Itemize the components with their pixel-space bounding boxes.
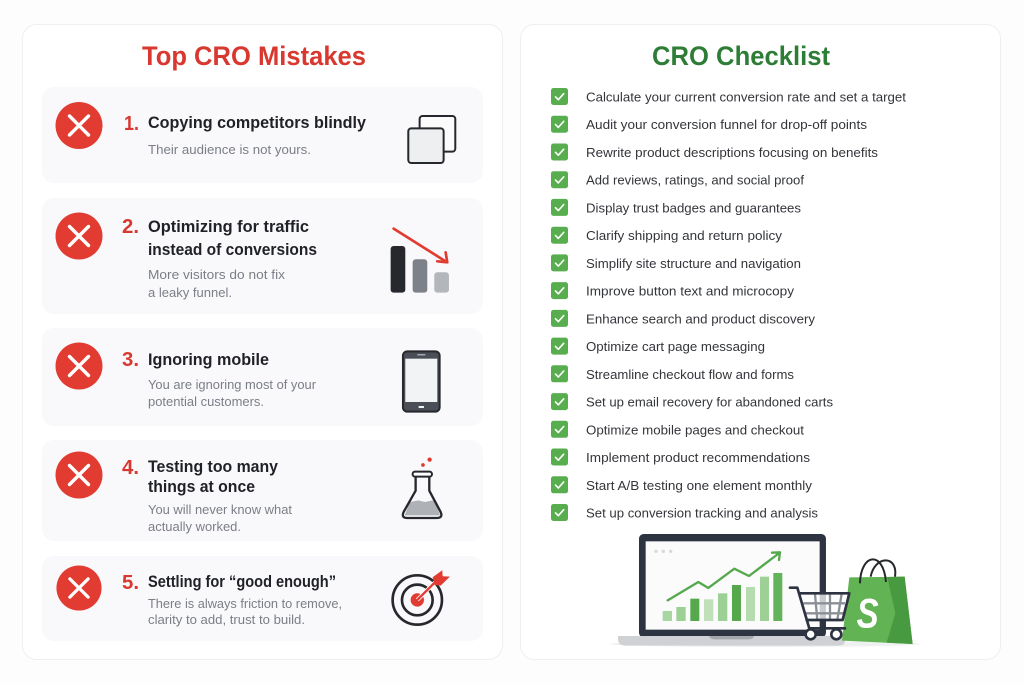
panel: top CRO mistakes: [22, 24, 502, 660]
title: mistakes: Top CRO Mistakes: [142, 41, 366, 71]
mistake 1: [42, 87, 483, 183]
mistake 4: You will never know what: [148, 502, 292, 517]
checklist items: [551, 88, 906, 521]
mistake 1: Copying competitors blindly: [148, 113, 367, 132]
checklist items: Set up conversion tracking and analysis: [586, 506, 819, 520]
mistake 2: More visitors do not fix: [148, 267, 286, 282]
checklist items: Enhance search and product discovery: [586, 311, 816, 326]
mistake 4: 4.: [122, 457, 139, 479]
title: checklist: CRO Checklist: [652, 41, 830, 71]
icon: flask: [403, 457, 441, 518]
checklist items: Rewrite product descriptions focusing on benefits: [586, 145, 879, 160]
icon: copy squares: [408, 116, 455, 163]
checklist items: Optimize cart page messaging: [586, 339, 765, 354]
laptop: [618, 534, 845, 646]
illustration: laptop, cart and shopping bag: [610, 534, 920, 647]
checklist items: Set up email recovery for abandoned carts: [586, 395, 834, 410]
mistake 3: potential customers.: [148, 394, 264, 409]
mistake 5: 5.: [122, 572, 139, 594]
mistake 3: You are ignoring most of your: [148, 377, 317, 392]
mistake 4: [42, 440, 483, 541]
mistake 4: Testing too many: [148, 457, 278, 476]
mistake 5: Settling for “good enough”: [148, 572, 336, 591]
mistake 5: clarity to add, trust to build.: [148, 612, 305, 627]
icon: target with dart: [393, 570, 450, 625]
mistake 5: [42, 556, 483, 641]
mistake 3: Ignoring mobile: [148, 350, 269, 369]
mistake 2: a leaky funnel.: [148, 285, 232, 300]
icon: smartphone: [403, 351, 440, 412]
checklist items: Add reviews, ratings, and social proof: [586, 173, 804, 188]
shopping bag: [842, 559, 913, 644]
checklist items: Display trust badges and guarantees: [586, 200, 802, 215]
checklist items: Streamline checkout flow and forms: [586, 367, 794, 382]
checklist items: Improve button text and microcopy: [586, 284, 795, 299]
shopping cart: [790, 588, 849, 639]
mistake 1: Their audience is not yours.: [148, 142, 311, 157]
mistake 4: actually worked.: [148, 519, 241, 534]
mistake 3: [42, 328, 483, 426]
checklist items: Start A/B testing one element monthly: [586, 478, 813, 493]
checklist items: Optimize mobile pages and checkout: [586, 422, 804, 437]
bar chart with growth arrow: [663, 552, 782, 621]
shopping bag: S: [857, 589, 879, 636]
mistake 2: [42, 198, 483, 314]
checklist items: Audit your conversion funnel for drop-off points: [586, 117, 868, 132]
mistake 4: things at once: [148, 477, 255, 496]
mistake 2: Optimizing for traffic: [148, 217, 309, 236]
checklist items: Implement product recommendations: [586, 450, 811, 465]
mistake 3: 3.: [122, 349, 139, 371]
mistake 2: 2.: [122, 216, 139, 238]
mistake 5: There is always friction to remove,: [148, 596, 342, 611]
checklist items: Calculate your current conversion rate and set a target: [586, 90, 906, 104]
panel: CRO checklist: [520, 24, 1000, 660]
mistake 2: instead of conversions: [148, 240, 317, 259]
checklist items: Clarify shipping and return policy: [586, 228, 783, 243]
icon: declining bars with arrow: [391, 229, 449, 293]
checklist items: Simplify site structure and navigation: [586, 256, 801, 271]
mistake 1: 1.: [124, 113, 139, 135]
